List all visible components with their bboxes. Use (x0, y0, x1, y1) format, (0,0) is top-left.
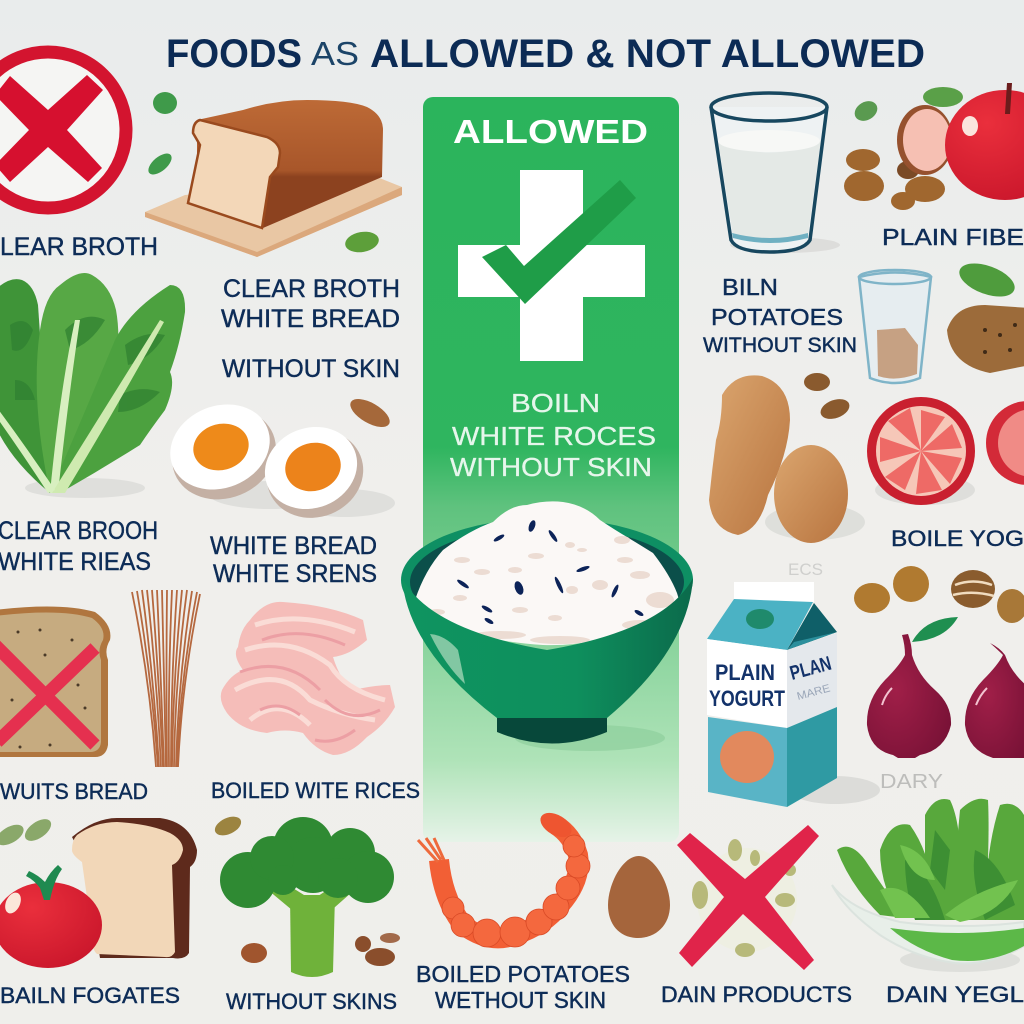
icon: shrimp (418, 808, 590, 947)
icon: pink meat (221, 602, 395, 755)
icon: tomato (0, 865, 102, 968)
icon: red apple top (923, 83, 1024, 200)
label: clear broth white rieas: CLEAR BROOH (0, 517, 158, 545)
icon: walnuts row (854, 566, 1024, 623)
icon: glass of milk (711, 93, 840, 253)
text: biln potatoes without skin (703, 274, 857, 357)
icon: potatoes (709, 373, 865, 543)
icon: boiled eggs (157, 390, 395, 532)
icon: large red cross-out circle (0, 52, 126, 208)
icon: milk carton: YOGURT (709, 686, 785, 711)
icon: milk carton: PLAIN (715, 660, 775, 685)
icon: grapefruit slices (867, 397, 1024, 505)
text: boiled potatoes without skin (416, 961, 630, 1013)
text: biln potatoes without skin: POTATOES (711, 304, 843, 330)
icon: bread loaf on board (145, 100, 402, 257)
label: faded ecs: ECS (788, 560, 823, 579)
label: white bread white srens (210, 532, 377, 588)
label: boiled wite rices: BOILED WITE RICES (211, 778, 420, 803)
text: allowed caption: BOILN (511, 388, 600, 418)
icon: small glass with nuts (859, 270, 931, 383)
icon: bread slice bottom (72, 818, 197, 958)
icon: white cross with green check (458, 170, 645, 361)
text: allowed caption: WHITE ROCES (452, 421, 656, 451)
icon: leaves top (145, 92, 380, 255)
icon: faded food behind x (692, 839, 797, 957)
icon: big red x (677, 825, 819, 970)
text: clear broth white bread: WHITE BREAD (221, 305, 400, 333)
text: clear broth white bread (221, 275, 400, 383)
label: faded dairy: DARY (880, 771, 943, 793)
label: clear broth top: LEAR BROTH (0, 233, 158, 261)
text: allowed caption: WITHOUT SKIN (450, 452, 652, 482)
label: plain fiber: PLAIN FIBE (882, 224, 1024, 250)
icon: milk carton: PLAN (788, 653, 834, 685)
title: AS (311, 35, 359, 72)
icon: rice bowl (401, 501, 693, 751)
label: white bread white srens: WHITE BREAD (210, 532, 377, 560)
text: clear broth white bread: CLEAR BROTH (223, 275, 400, 303)
icon: broccoli (220, 817, 400, 977)
label: boile yogurt: BOILE YOG (891, 526, 1024, 551)
icon: beets (867, 617, 1024, 758)
text: biln potatoes without skin: WITHOUT SKIN (703, 334, 857, 357)
icon: leafy salad bowl (832, 799, 1024, 972)
label: dain yegl: DAIN YEGL (886, 982, 1024, 1007)
label: bailn fogates: BAILN FOGATES (0, 983, 180, 1008)
panel: allowed (423, 97, 679, 842)
text: boiled potatoes without skin: WETHOUT SKIN (435, 987, 606, 1013)
icon: leaf right (955, 257, 1019, 303)
text: clear broth white bread: WITHOUT SKIN (222, 355, 400, 383)
text: biln potatoes without skin: BILN (722, 274, 778, 300)
title: ALLOWED & NOT ALLOWED (370, 32, 925, 76)
label: wuits bread: WUITS BREAD (0, 779, 148, 804)
icon: noodles (132, 590, 200, 767)
icon: crossed toast (0, 606, 110, 757)
icon: grapefruit half (897, 105, 953, 175)
text: boiled potatoes without skin: BOILED POTATOES (416, 961, 630, 987)
label: dain products: DAIN PRODUCTS (661, 982, 852, 1007)
label: clear broth white rieas (0, 517, 158, 576)
icon: milk carton: MARE (796, 683, 832, 703)
icon: leaf small top (851, 97, 881, 125)
text: allowed caption (450, 388, 656, 482)
icon: brown nuts right (947, 305, 1024, 373)
label: white bread white srens: WHITE SRENS (213, 560, 377, 588)
heading: allowed: ALLOWED (453, 113, 648, 150)
title: FOODS (166, 32, 302, 76)
icon: romaine lettuce (0, 273, 185, 498)
icon: nuts cluster (844, 149, 945, 210)
icon: egg (608, 856, 670, 938)
icon: milk carton (707, 582, 880, 807)
label: clear broth white rieas: WHITE RIEAS (0, 548, 151, 576)
label: without skins: WITHOUT SKINS (226, 989, 397, 1014)
icon: small leaves bottom-left (0, 813, 244, 849)
